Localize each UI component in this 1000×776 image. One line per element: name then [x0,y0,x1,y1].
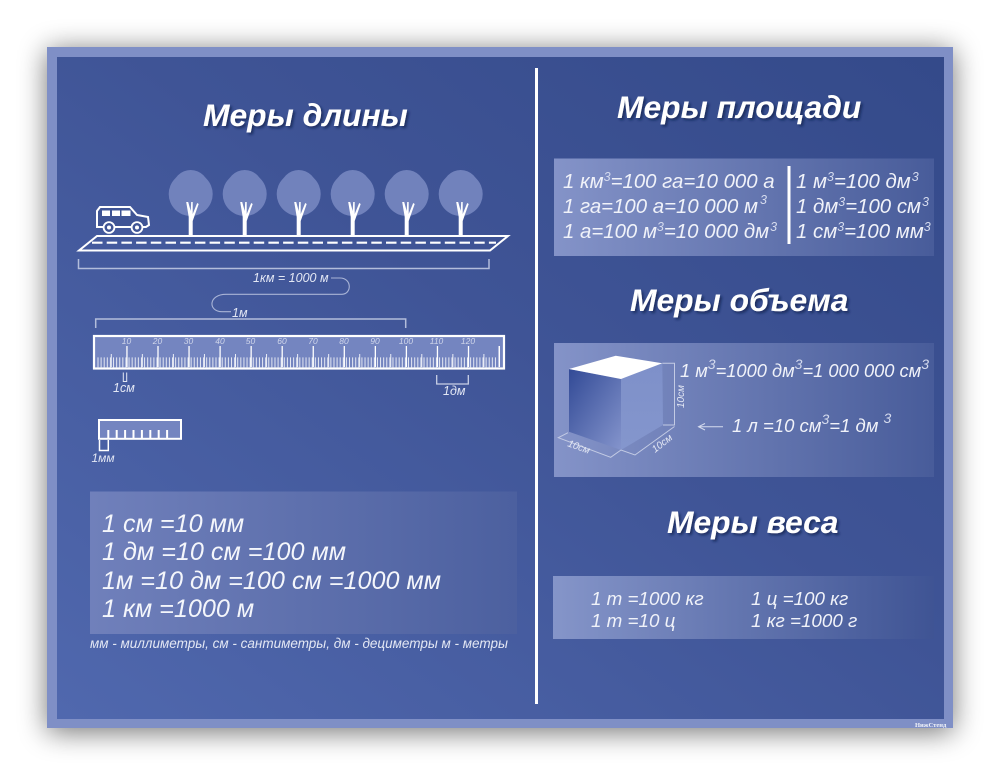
marker: 1 dm: 1дм [443,384,466,398]
panel: area units: =100 дм [834,171,911,193]
panel: area units: 3 [912,170,919,184]
marker: 1 cm [113,372,135,395]
panel: weight units: 1 кг =1000 г [751,610,857,631]
ruler numbers: 110 [430,336,444,346]
ruler numbers: 120 [461,336,475,346]
marker: 1 mm: 1мм [92,451,115,465]
panel: area units: =100 см [845,196,921,218]
panel: area units: 1 га=100 а=10 000 м [563,196,758,218]
panel: volume units: 3 [795,356,803,372]
panel: volume units [554,343,934,477]
panel: weight units: 1 т =1000 кг [591,588,704,609]
panel: volume units: =1 дм [829,415,884,436]
ruler numbers: 40 [215,336,225,346]
panel: area units [554,158,934,256]
marker: 1 dm [437,375,468,398]
ruler numbers: 80 [339,336,349,346]
icon: car [97,207,149,233]
panel: area units: 1 см [796,221,837,243]
watermark: НижСтенд [915,722,947,729]
icon: cube: 10см [566,438,591,457]
panel: area units: 1 км [563,171,604,193]
arrow [698,424,723,430]
icon: cube: 10см [676,385,687,408]
ruler numbers: 50 [246,336,255,346]
ruler numbers: 60 [277,336,287,346]
bracket: 1 m [96,319,406,328]
ruler numbers: 30 [184,336,193,346]
panel: area units: 3 [770,220,777,234]
panel: area units: =100 га=10 000 а [611,171,775,193]
panel: area units: 3 [924,220,931,234]
marker: 1 cm: 1см [113,381,135,395]
heading: length: Меры длины [203,97,408,133]
label: 1 m: 1м [232,306,248,320]
panel: length units [90,492,517,634]
curve from 1 km to 1 m [212,278,349,312]
panel: area units: 1 м [796,171,827,193]
trees [169,170,483,235]
heading: area: Меры площади [617,89,861,125]
board frame [47,47,953,728]
panel: area units: =10 000 дм [664,221,769,243]
panel: length units: 1 см =10 мм [102,510,244,538]
ruler ticks [98,346,500,367]
panel: volume units: 3 [921,356,929,372]
ruler numbers: 20 [152,336,162,346]
shadow [47,50,953,732]
bracket: 1 km [78,259,489,268]
panel: area units: 3 [922,195,929,209]
board background [57,57,944,719]
panel: weight units: 1 ц =100 кг [751,588,848,609]
panel: area units: 3 [838,195,845,209]
icon: cube [558,356,687,457]
road [79,236,508,250]
panel: area units: =100 мм [844,221,924,243]
panel: length units: 1м =10 дм =100 см =1000 мм [102,567,441,595]
panel: area units: 1 дм [796,196,838,218]
panel: volume units: =1000 дм [716,360,795,381]
panel: length units: 1 дм =10 см =100 мм [102,538,346,566]
panel divider [788,166,790,244]
caption: abbreviations: мм - миллиметры, см - сантиметры, дм - дециметры м - метры [90,636,508,651]
illustration: road with car and trees [79,170,508,250]
panel: area units: 3 [604,170,611,184]
panel: weight units: 1 т =10 ц [591,610,676,631]
panel: volume units: 1 м [680,360,708,381]
panel: volume units: 3 [821,411,829,427]
ruler numbers [122,336,475,346]
panel: area units: 1 а=100 м [563,221,657,243]
ruler numbers: 70 [308,336,318,346]
label: 1 km: 1км = 1000 м [253,271,329,285]
ruler numbers: 100 [399,336,413,346]
center divider [535,68,538,704]
marker: 1 mm [92,440,115,465]
panel: volume units: 1 л =10 см [732,415,821,436]
panel: volume units: =1 000 000 см [802,360,922,381]
panel: volume units: 3 [708,356,716,372]
panel: area units: 3 [657,220,664,234]
panel: volume units: 3 [884,410,892,426]
panel: area units: 3 [827,170,834,184]
panel: area units: 3 [760,193,767,207]
heading: weight: Меры веса [667,504,838,540]
ruler numbers: 90 [370,336,380,346]
small ruler [99,420,181,439]
panel: area units: 3 [837,220,844,234]
ruler numbers: 10 [122,336,131,346]
heading: volume: Меры объема [630,282,848,318]
ruler [94,336,504,368]
panel: length units: 1 км =1000 м [102,595,254,623]
panel: weight units [553,576,934,639]
icon: cube: 10см [650,432,675,455]
